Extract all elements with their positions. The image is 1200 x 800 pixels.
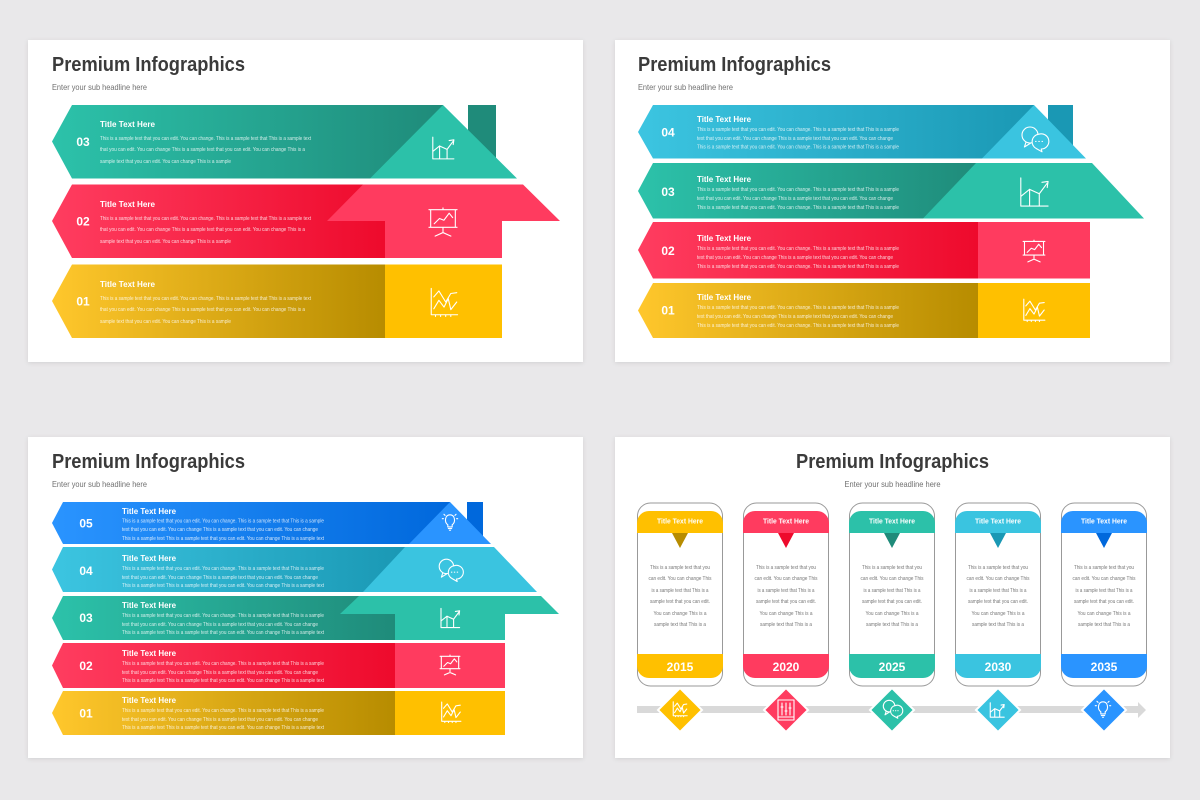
card 2030: 2030 [985, 660, 1012, 674]
card 2020: 2020 [773, 660, 800, 674]
bar 03 roof eaves: This is a sample text that you can edit. You can change. This is a sample text that This is a sample [122, 613, 324, 619]
card 2035: This is a sample text that you [1074, 565, 1134, 571]
bar 03 roof eaves: Title Text Here [122, 601, 177, 610]
card 2035: is a sample text that This is a [1076, 588, 1133, 594]
card 2015 [637, 503, 723, 686]
bar 05 roof top: Title Text Here [122, 507, 177, 516]
bar 04 roof top [638, 105, 1086, 158]
bar 01: Title Text Here [697, 293, 752, 302]
chimney [1048, 105, 1073, 147]
card 2030: Title Text Here [975, 518, 1021, 526]
card 2025: You can change This is a [866, 611, 919, 617]
bar 03 roof top: Title Text Here [100, 120, 156, 129]
bar 01: 01 [79, 706, 93, 720]
bar 03 roof eaves: Title Text Here [697, 175, 752, 184]
bar 02: text that you can edit. You can change This is a sample text that you can edit. You can change [697, 255, 893, 261]
bar 04 roof middle: 04 [79, 564, 93, 578]
bar 01 base: This is a sample text that you can edit. You can change. This is a sample text that This is a sample text [100, 296, 312, 302]
card 2015: 2015 [667, 660, 694, 674]
bar 03 roof eaves [52, 596, 559, 640]
bar 05 roof top: 05 [79, 516, 93, 530]
card 2025 [849, 503, 935, 686]
card 2035: can edit. You can change This [1072, 576, 1136, 582]
card 2020: sample text that you can edit. [756, 599, 816, 605]
diamond 2025 [870, 688, 914, 732]
card 2035: sample text that This is a [1078, 622, 1130, 628]
card 2035: 2035 [1091, 660, 1118, 674]
bar 05 roof top [52, 502, 491, 544]
sub headline: Enter your sub headline here [638, 82, 733, 92]
bar 02 roof eaves: Title Text Here [100, 200, 156, 209]
panel: bottom-left house with five bars [28, 437, 583, 758]
bar 02: This is a sample text that you can edit. You can change. This is a sample text that This is a sample [122, 661, 324, 667]
card 2015: can edit. You can change This [648, 576, 712, 582]
bar 01 [52, 691, 505, 735]
bar 01 base: 01 [76, 294, 90, 308]
card 2030: is a sample text that This is a [970, 588, 1027, 594]
panel: top-left house with three bars [28, 40, 583, 362]
card 2020: Title Text Here [763, 518, 809, 526]
card 2015: sample text that This is a [654, 622, 706, 628]
card 2025: Title Text Here [869, 518, 915, 526]
sub headline: Enter your sub headline here [52, 479, 147, 489]
sub headline: Enter your sub headline here [844, 479, 941, 489]
bar 04 roof top: Title Text Here [697, 115, 752, 124]
card 2025: is a sample text that This is a [864, 588, 921, 594]
bar 03 roof top: that you can edit. You can change This is a sample text that you can edit. You can change This is a [100, 147, 305, 153]
card 2025: This is a sample text that you [862, 565, 922, 571]
bar 03 roof top: This is a sample text that you can edit. You can change. This is a sample text that This is a sample text [100, 136, 312, 142]
bar 01 base [52, 264, 502, 338]
bar 02: This is a sample text This is a sample text that you can edit. You can change This is a sample text [122, 678, 325, 684]
bar 02: 02 [79, 659, 93, 673]
bar 02: Title Text Here [122, 649, 177, 658]
bar 01: Title Text Here [122, 696, 177, 705]
card 2025: can edit. You can change This [860, 576, 924, 582]
card 2015: Title Text Here [657, 518, 703, 526]
diamond 2030 [976, 688, 1020, 732]
bar 05 roof top: text that you can edit. You can change This is a sample text that you can edit. You can change [122, 527, 318, 533]
sub headline: Enter your sub headline here [52, 82, 147, 92]
card 2015: is a sample text that This is a [652, 588, 709, 594]
bar 03 roof top: 03 [76, 135, 90, 149]
heading: Premium Infographics [796, 451, 989, 473]
bar 03 roof eaves: This is a sample text that you can edit. You can change. This is a sample text that This is a sample [697, 205, 899, 211]
bar 01 [638, 283, 1090, 338]
bar 01 base: that you can edit. You can change This is a sample text that you can edit. You can change This is a [100, 307, 305, 313]
bar 01: This is a sample text that you can edit. You can change. This is a sample text that This is a sample [697, 305, 899, 311]
diamond 2035 [1082, 688, 1126, 732]
bar 02 roof eaves: sample text that you can edit. You can change This is a sample [100, 239, 231, 245]
card 2030: This is a sample text that you [968, 565, 1028, 571]
bar 02: text that you can edit. You can change This is a sample text that you can edit. You can change [122, 670, 318, 676]
bar 05 roof top: This is a sample text that you can edit. You can change. This is a sample text that This is a sample [122, 518, 324, 524]
bar 05 roof top: This is a sample text This is a sample text that you can edit. You can change This is a sample text [122, 536, 325, 542]
bar 03 roof top [52, 105, 517, 178]
bar 01: This is a sample text that you can edit. You can change. This is a sample text that This is a sample [697, 323, 899, 329]
bar 04 roof middle: This is a sample text that you can edit. You can change. This is a sample text that This is a sample [122, 566, 324, 572]
card 2020 [743, 503, 829, 686]
bar 03 roof eaves: text that you can edit. You can change This is a sample text that you can edit. You can change [122, 622, 318, 628]
bar 02: Title Text Here [697, 234, 752, 243]
card 2025: sample text that This is a [866, 622, 918, 628]
bar 04 roof middle: text that you can edit. You can change This is a sample text that you can edit. You can change [122, 575, 318, 581]
bar 02 [638, 222, 1090, 278]
card 2015: sample text that you can edit. [650, 599, 710, 605]
bar 01: This is a sample text that you can edit. You can change. This is a sample text that This is a sample [122, 708, 324, 714]
chimney [467, 502, 483, 538]
bar 01: text that you can edit. You can change This is a sample text that you can edit. You can change [697, 314, 893, 320]
bar 03 roof eaves: 03 [79, 611, 93, 625]
card 2035 [1061, 503, 1147, 686]
bar 02: This is a sample text that you can edit. You can change. This is a sample text that This is a sample [697, 246, 899, 252]
bar 04 roof top: This is a sample text that you can edit. You can change. This is a sample text that This is a sample [697, 127, 899, 133]
bar 03 roof eaves [638, 163, 1144, 218]
bar 01: 01 [661, 304, 675, 318]
panel: top-right house with four bars [615, 40, 1170, 362]
heading: Premium Infographics [52, 54, 245, 76]
bar 03 roof top: sample text that you can edit. You can change This is a sample [100, 159, 231, 165]
bar 04 roof middle [52, 547, 537, 592]
card 2020: This is a sample text that you [756, 565, 816, 571]
bar 02 roof eaves: 02 [76, 214, 90, 228]
timeline arrow [637, 702, 1146, 718]
card 2015: You can change This is a [654, 611, 707, 617]
card 2030: sample text that you can edit. [968, 599, 1028, 605]
chimney [468, 105, 496, 160]
bar 01: text that you can edit. You can change This is a sample text that you can edit. You can change [122, 717, 318, 723]
bar 02 roof eaves: This is a sample text that you can edit. You can change. This is a sample text that This is a sample text [100, 216, 312, 222]
bar 02: 02 [661, 244, 675, 258]
heading: Premium Infographics [638, 54, 831, 76]
bar 04 roof top: This is a sample text that you can edit. You can change. This is a sample text that This is a sample [697, 144, 899, 150]
bar 01: This is a sample text This is a sample text that you can edit. You can change This is a sample text [122, 725, 325, 731]
bar 04 roof middle: This is a sample text This is a sample text that you can edit. You can change This is a sample text [122, 583, 325, 589]
diamond 2020 [764, 688, 808, 732]
bar 04 roof top: text that you can edit. You can change This is a sample text that you can edit. You can change [697, 136, 893, 142]
card 2035: sample text that you can edit. [1074, 599, 1134, 605]
bar 02 roof eaves: that you can edit. You can change This is a sample text that you can edit. You can change This is a [100, 227, 305, 233]
card 2035: You can change This is a [1078, 611, 1131, 617]
card 2020: sample text that This is a [760, 622, 812, 628]
card 2020: You can change This is a [760, 611, 813, 617]
bar 03 roof eaves: This is a sample text This is a sample text that you can edit. You can change This is a sample text [122, 630, 325, 636]
bar 01 base: sample text that you can edit. You can change This is a sample [100, 319, 231, 325]
card 2030: can edit. You can change This [966, 576, 1030, 582]
bar 03 roof eaves: 03 [661, 185, 675, 199]
bar 02: This is a sample text that you can edit. You can change. This is a sample text that This is a sample [697, 264, 899, 270]
bar 01 base: Title Text Here [100, 280, 156, 289]
bar 02 roof eaves [52, 184, 560, 258]
bar 03 roof eaves: text that you can edit. You can change This is a sample text that you can edit. You can change [697, 196, 893, 202]
card 2035: Title Text Here [1081, 518, 1127, 526]
bar 04 roof top: 04 [661, 126, 675, 140]
card 2030: You can change This is a [972, 611, 1025, 617]
card 2020: is a sample text that This is a [758, 588, 815, 594]
card 2015: This is a sample text that you [650, 565, 710, 571]
card 2025: sample text that you can edit. [862, 599, 922, 605]
card 2020: can edit. You can change This [754, 576, 818, 582]
card 2030 [955, 503, 1041, 686]
bar 02 [52, 643, 505, 688]
heading: Premium Infographics [52, 451, 245, 473]
card 2030: sample text that This is a [972, 622, 1024, 628]
bar 04 roof middle: Title Text Here [122, 554, 177, 563]
diamond 2015 [658, 688, 702, 732]
panel: bottom-right timeline [615, 437, 1170, 758]
bar 03 roof eaves: This is a sample text that you can edit. You can change. This is a sample text that This is a sample [697, 187, 899, 193]
card 2025: 2025 [879, 660, 906, 674]
